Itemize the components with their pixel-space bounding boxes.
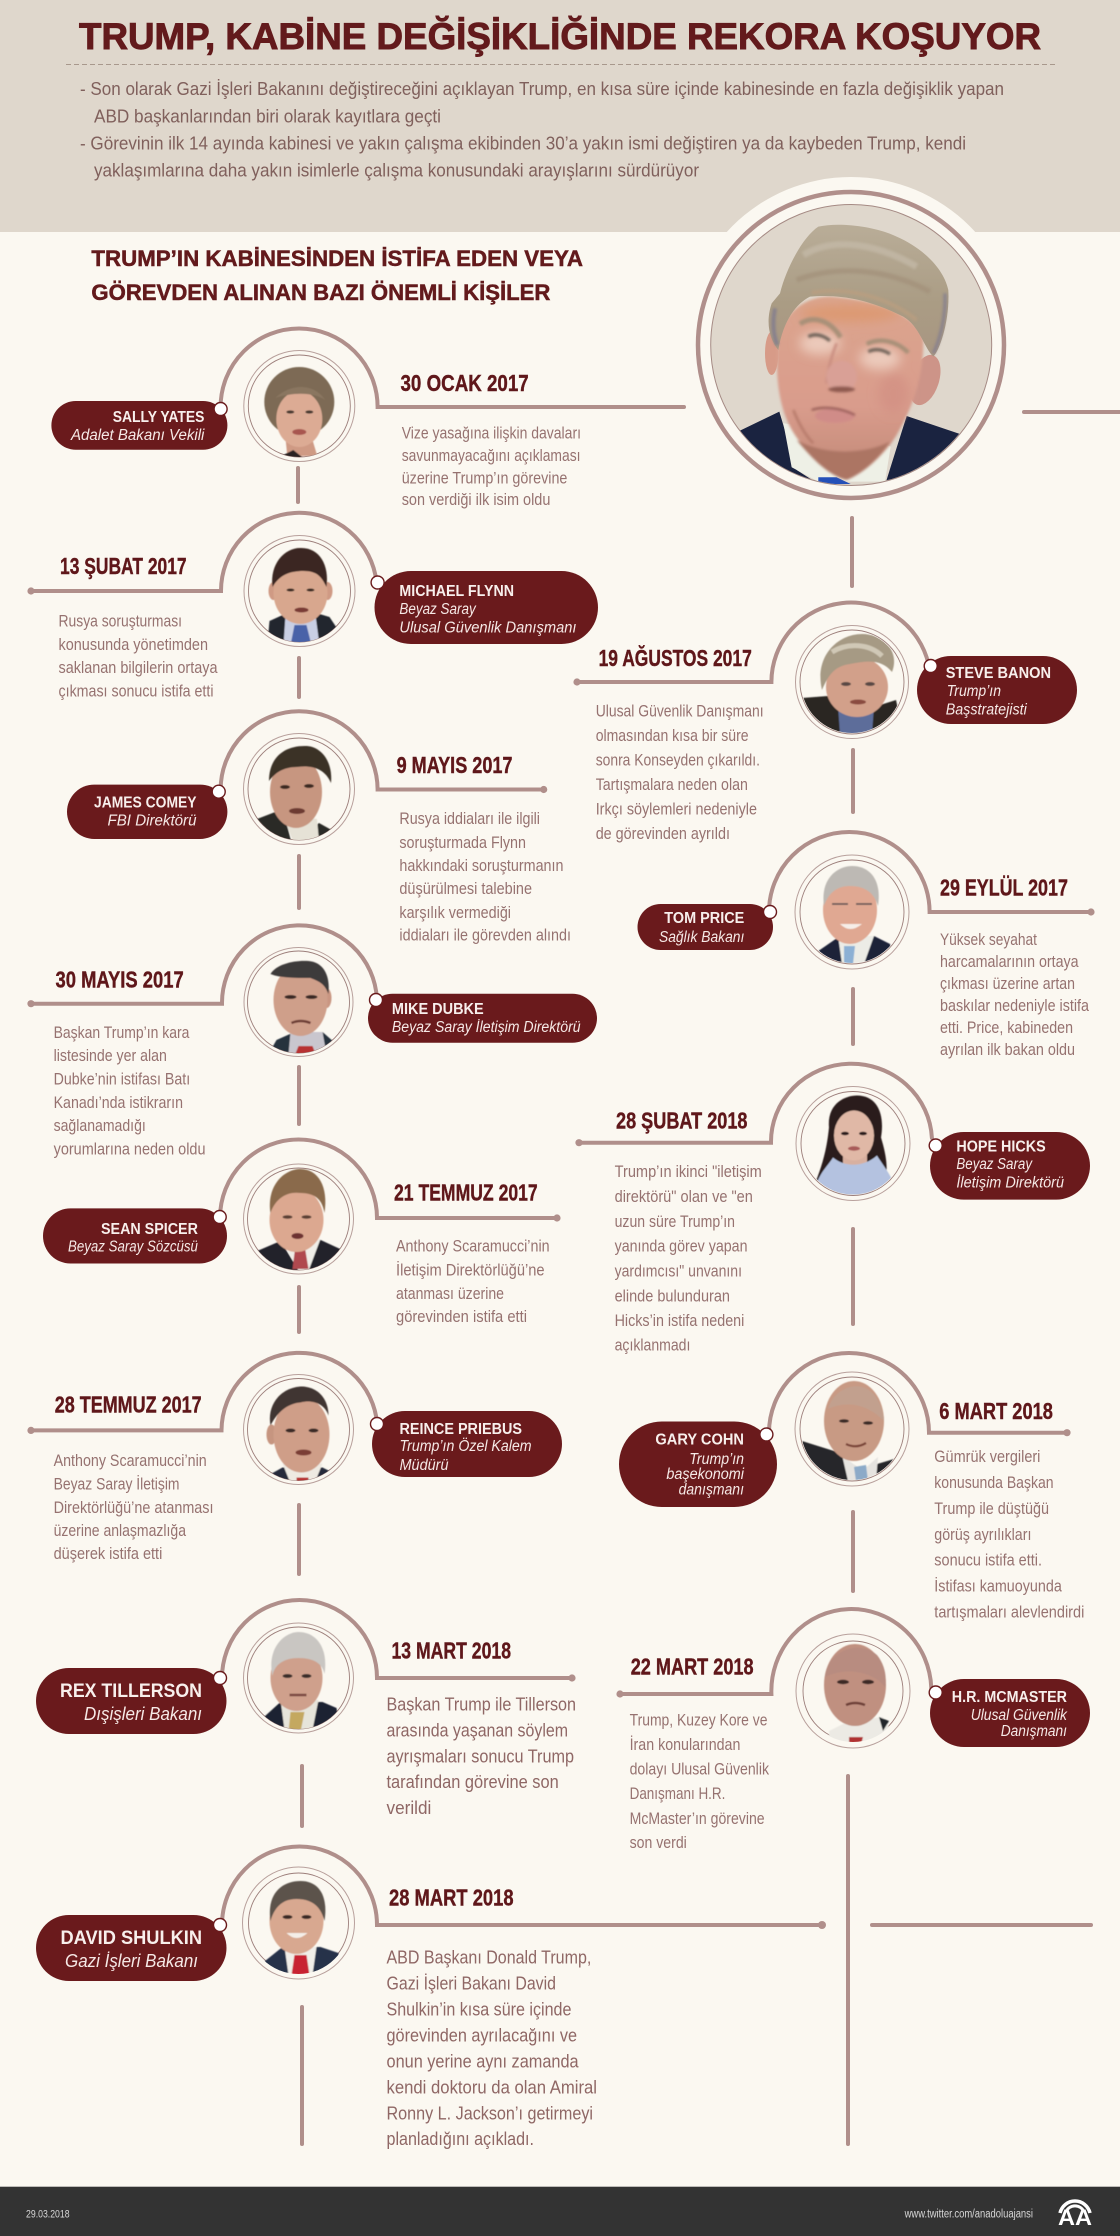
- connector: [300, 2007, 304, 2144]
- description: [615, 1163, 762, 1354]
- name pill: Müdürü: [400, 1457, 449, 1474]
- date: 19 AĞUSTOS 2017: [599, 644, 752, 671]
- name pill: Beyaz Saray: [399, 601, 477, 618]
- icon: AA logo: AA: [1058, 2205, 1092, 2230]
- line: from Trump to the right: [1024, 410, 1120, 414]
- description: Trump’ın ikinci "iletişim: [615, 1163, 762, 1181]
- photo: [244, 734, 354, 844]
- description: kendi doktoru da olan Amiral: [386, 2076, 597, 2097]
- description: [396, 1238, 550, 1326]
- arc and date line: [222, 1846, 821, 1925]
- arc and date line: [577, 603, 928, 682]
- name pill: GARY COHN: [655, 1431, 744, 1448]
- description: saklanan bilgilerin ortaya: [58, 659, 218, 677]
- panel: Trump portrait: [696, 177, 1006, 500]
- name pill: [36, 1668, 226, 1734]
- date: 29 EYLÜL 2017: [940, 874, 1068, 900]
- description: [402, 425, 581, 509]
- photo: [244, 948, 353, 1056]
- description: ayrışmaları sonucu Trump: [386, 1745, 574, 1766]
- arc and date line: [769, 832, 1090, 912]
- name pill: SALLY YATES: [113, 409, 205, 426]
- description: karşılık vermediği: [399, 904, 511, 922]
- connector: [851, 1512, 855, 1591]
- name pill: [51, 401, 227, 450]
- line end: [568, 1674, 576, 1682]
- description: yorumlarına neden oldu: [54, 1141, 205, 1159]
- name pill: Başstratejisti: [946, 701, 1027, 718]
- footer: [0, 2187, 1120, 2236]
- line end: [540, 786, 547, 793]
- line end: [575, 1139, 583, 1146]
- date: 28 TEMMUZ 2017: [55, 1392, 202, 1418]
- line end: [573, 678, 581, 686]
- description: Trump, Kuzey Kore ve: [630, 1712, 768, 1730]
- name pill: HOPE HICKS: [956, 1138, 1046, 1155]
- description: Ulusal Güvenlik Danışmanı: [596, 702, 764, 720]
- photo: [244, 1374, 354, 1484]
- description: [54, 1024, 205, 1159]
- icon: Trump face: [740, 224, 960, 484]
- name pill: Trump’ın Özel Kalem: [400, 1437, 532, 1455]
- panel: Tom Price: [638, 832, 1095, 1059]
- connector: Trump to Banon: [850, 518, 854, 586]
- description: Rusya iddiaları ile ilgili: [399, 810, 540, 828]
- description: tartışmaları alevlendirdi: [934, 1604, 1084, 1622]
- name pill: Adalet Bakanı Vekili: [70, 427, 205, 444]
- description: Anthony Scaramucci’nin: [54, 1452, 207, 1470]
- description: [399, 810, 571, 944]
- description: Irkçı söylemleri nedeniyle: [596, 800, 757, 818]
- name pill: Beyaz Saray: [956, 1156, 1033, 1173]
- name pill: SEAN SPICER: [101, 1221, 198, 1238]
- description: yardımcısı" unvanını: [615, 1262, 742, 1280]
- date: 13 MART 2018: [392, 1638, 511, 1664]
- name pill: Ulusal Güvenlik Danışmanı: [399, 619, 576, 636]
- connector: [851, 1229, 855, 1324]
- intro text: - Görevinin ilk 14 ayında kabinesi ve yakın çalışma ekibinden 30’a yakın ismi değiştiren ya da kaybeden Trump, kendi: [80, 132, 966, 153]
- line end: [616, 1690, 624, 1698]
- name pill: [619, 1422, 777, 1507]
- name pill: [36, 1915, 226, 1981]
- panel: Hope Hicks: [575, 1064, 1090, 1354]
- description: tarafından görevine son: [386, 1771, 559, 1792]
- description: Başkan Trump’ın kara: [54, 1024, 190, 1042]
- description: Dubke’nin istifası Batı: [54, 1070, 190, 1088]
- date: 9 MAYIS 2017: [397, 752, 512, 778]
- panel: Michael Flynn: [27, 513, 598, 700]
- date stamp: 29.03.2018: [26, 2209, 70, 2221]
- twitter url: www.twitter.com/anadoluajansi: [904, 2209, 1033, 2221]
- title: TRUMP, KABİNE DEĞİŞİKLİĞİNDE REKORA KOŞUYOR: [79, 16, 1041, 57]
- description: görevinden ayrılacağını ve: [386, 2024, 577, 2046]
- name pill: İletişim Direktörü: [956, 1175, 1064, 1192]
- panel: Steve Banon: [573, 603, 1077, 843]
- date: 30 MAYIS 2017: [56, 967, 184, 993]
- description: [58, 612, 218, 700]
- arc and date line: [31, 1353, 377, 1430]
- name pill: H.R. MCMASTER: [952, 1689, 1067, 1706]
- arc and date line: [620, 1609, 931, 1694]
- photo: [795, 855, 909, 969]
- panel: Gary Cohn: [619, 1353, 1084, 1622]
- timeline end line: [846, 1776, 850, 2144]
- description: Yüksek seyahat: [940, 931, 1037, 949]
- description: çıkması sonucu istifa etti: [58, 682, 214, 700]
- date: 28 MART 2018: [389, 1884, 514, 1910]
- description: [386, 1694, 576, 1818]
- name pill: [368, 994, 597, 1043]
- name pill: Dışişleri Bakanı: [84, 1704, 202, 1724]
- description: Hicks’in istifa nedeni: [615, 1312, 744, 1330]
- description: İran konularından: [630, 1735, 740, 1754]
- intro text: ABD başkanlarından biri olarak kayıtlara geçti: [94, 105, 441, 126]
- description: Shulkin’in kısa süre içinde: [386, 1999, 571, 2020]
- description: İletişim Direktörlüğü’ne: [396, 1261, 545, 1280]
- photo: [796, 626, 908, 738]
- arc and date line: [221, 711, 543, 790]
- description: Danışmanı H.R.: [630, 1785, 725, 1803]
- name pill: REX TILLERSON: [60, 1681, 202, 1702]
- name pill: başekonomi: [666, 1466, 745, 1483]
- panel: Mike Dubke: [27, 925, 597, 1159]
- panel: Sean Spicer: [43, 1140, 561, 1326]
- connector: [296, 468, 300, 502]
- description: konusunda yönetimden: [58, 636, 208, 654]
- description: elinde bulunduran: [615, 1287, 730, 1305]
- description: soruşturmada Flynn: [399, 834, 526, 852]
- description: Ronny L. Jackson’ı getirmeyi: [386, 2102, 593, 2123]
- date: 21 TEMMUZ 2017: [394, 1180, 538, 1206]
- line: lower right horizontal: [872, 1923, 1091, 1927]
- line end: [818, 1921, 826, 1929]
- subheading: TRUMP’IN KABİNESİNDEN İSTİFA EDEN VEYA: [91, 246, 583, 271]
- description: son verdiği ilk isim oldu: [402, 491, 550, 509]
- description: arasında yaşanan söylem: [386, 1720, 568, 1740]
- panel: Rex Tillerson: [36, 1600, 576, 1818]
- name pill: [370, 1411, 562, 1477]
- date: 22 MART 2018: [631, 1654, 754, 1680]
- description: baskılar nedeniyle istifa: [940, 997, 1090, 1015]
- description: McMaster’ın görevine: [630, 1810, 765, 1828]
- description: Başkan Trump ile Tillerson: [386, 1694, 576, 1714]
- description: hakkındaki soruşturmanın: [399, 857, 564, 875]
- date: 6 MART 2018: [939, 1398, 1053, 1424]
- description: uzun süre Trump’ın: [615, 1213, 735, 1231]
- photo: [796, 1086, 910, 1200]
- description: onun yerine aynı zamanda: [386, 2050, 579, 2071]
- description: Kanadı’nda istikrarın: [54, 1094, 183, 1112]
- description: listesinde yer alan: [54, 1047, 167, 1065]
- connector: [297, 1287, 301, 1332]
- name pill: MIKE DUBKE: [392, 1001, 484, 1018]
- date: 28 ŞUBAT 2018: [616, 1107, 748, 1133]
- line end: [27, 1427, 35, 1434]
- connector: [300, 1766, 304, 1826]
- connector: [297, 856, 301, 908]
- arc and date line: [220, 1140, 556, 1218]
- panel: James Comey: [67, 711, 571, 944]
- description: direktörü" olan ve "en: [615, 1188, 753, 1206]
- description: [630, 1712, 770, 1852]
- photo: [244, 1164, 354, 1274]
- intro text: [80, 78, 1004, 181]
- description: görüş ayrılıkları: [934, 1526, 1031, 1544]
- description: harcamalarının ortaya: [940, 953, 1079, 971]
- name pill: [43, 1208, 227, 1264]
- description: ayrılan ilk bakan oldu: [940, 1041, 1075, 1059]
- description: savunmayacağını açıklaması: [402, 447, 580, 465]
- description: sağlanamadığı: [54, 1117, 146, 1135]
- photo: [244, 350, 355, 462]
- description: etti. Price, kabineden: [940, 1019, 1073, 1037]
- line end: [553, 1214, 561, 1222]
- description: verildi: [386, 1797, 431, 1818]
- description: konusunda Başkan: [934, 1474, 1054, 1492]
- connector: [297, 1067, 301, 1124]
- panel: Reince Priebus: [27, 1353, 562, 1563]
- arc and date line: [31, 925, 377, 1004]
- header band: [0, 0, 1120, 232]
- description: Rusya soruşturması: [58, 612, 182, 630]
- name pill: Ulusal Güvenlik: [971, 1707, 1068, 1724]
- name pill: Danışmanı: [1001, 1723, 1067, 1740]
- description: düşürülmesi talebine: [399, 880, 532, 898]
- connector: [297, 1505, 301, 1574]
- description: üzerine anlaşmazlığa: [54, 1522, 187, 1540]
- description: düşerek istifa etti: [54, 1545, 162, 1563]
- line end: [1087, 908, 1095, 916]
- description: üzerine Trump’ın görevine: [402, 469, 567, 487]
- description: Tartışmalara neden olan: [596, 776, 748, 794]
- date: 13 ŞUBAT 2017: [60, 553, 187, 579]
- name pill: JAMES COMEY: [94, 794, 197, 812]
- intro text: - Son olarak Gazi İşleri Bakanını değiştireceğini açıklayan Trump, en kısa süre içinde kabinesinde en fazla değişiklik yapan: [80, 78, 1004, 99]
- description: [386, 1947, 597, 2149]
- name pill: [371, 571, 598, 644]
- connector: [851, 989, 855, 1044]
- photo: [242, 1867, 354, 1979]
- name pill: STEVE BANON: [946, 665, 1051, 682]
- description: İstifası kamuoyunda: [934, 1577, 1063, 1596]
- description: görevinden istifa etti: [396, 1308, 527, 1326]
- description: açıklanmadı: [615, 1336, 690, 1354]
- name pill: TOM PRICE: [664, 910, 745, 927]
- line end: [1063, 1429, 1071, 1436]
- name pill: Trump’ın: [947, 683, 1001, 700]
- description: Direktörlüğü’ne atanması: [54, 1499, 213, 1517]
- photo: [244, 536, 355, 646]
- name pill: [917, 656, 1077, 724]
- description: atanması üzerine: [396, 1285, 504, 1303]
- name pill: [929, 1132, 1090, 1200]
- description: [940, 931, 1090, 1059]
- name pill: DAVID SHULKIN: [60, 1928, 202, 1949]
- date: 30 OCAK 2017: [400, 370, 529, 396]
- photo: [244, 1623, 354, 1733]
- name pill: danışmanı: [679, 1482, 744, 1499]
- connector: [297, 658, 301, 697]
- description: [934, 1448, 1084, 1622]
- description: son verdi: [630, 1834, 687, 1852]
- description: planladığını açıkladı.: [386, 2128, 534, 2149]
- description: de görevinden ayrıldı: [596, 825, 730, 843]
- subheading: [91, 246, 583, 305]
- name pill: MICHAEL FLYNN: [399, 583, 514, 600]
- description: sonucu istifa etti.: [934, 1552, 1042, 1570]
- description: Gazi İşleri Bakanı David: [386, 1973, 556, 1994]
- description: olmasından kısa bir süre: [596, 727, 749, 745]
- name pill: [638, 904, 776, 950]
- name pill: [929, 1679, 1090, 1747]
- description: Beyaz Saray İletişim: [54, 1474, 180, 1493]
- description: ABD Başkanı Donald Trump,: [386, 1947, 591, 1968]
- connector: [851, 750, 855, 812]
- description: yanında görev yapan: [615, 1237, 748, 1255]
- subheading: GÖREVDEN ALINAN BAZI ÖNEMLİ KİŞİLER: [91, 280, 551, 305]
- description: [596, 702, 764, 843]
- description: dolayı Ulusal Güvenlik: [630, 1761, 770, 1779]
- arc and date line: [769, 1353, 1066, 1433]
- photo: [795, 1372, 909, 1486]
- panel: David Shulkin: [36, 1846, 826, 2149]
- panel: H.R. McMaster: [616, 1609, 1090, 1852]
- line end: [27, 1000, 35, 1007]
- name pill: Sağlık Bakanı: [659, 929, 744, 946]
- panel: Sally Yates: [51, 328, 684, 509]
- description: Vize yasağına ilişkin davaları: [402, 425, 581, 443]
- description: çıkması üzerine artan: [940, 975, 1075, 993]
- arc and date line: [222, 1600, 571, 1678]
- line end: [27, 587, 35, 595]
- name pill: Gazi İşleri Bakanı: [65, 1951, 198, 1971]
- name pill: FBI Direktörü: [108, 813, 197, 830]
- intro text: yaklaşımlarına daha yakın isimlerle çalışma konusundaki arayışlarını sürdürüyor: [94, 160, 699, 181]
- name pill: Trump’ın: [689, 1451, 744, 1468]
- name pill: Beyaz Saray İletişim Direktörü: [392, 1019, 581, 1036]
- photo: [796, 1634, 910, 1748]
- arc and date line: [579, 1064, 932, 1143]
- name pill: REINCE PRIEBUS: [400, 1421, 522, 1438]
- description: Trump ile düştüğü: [934, 1500, 1049, 1518]
- description: sonra Konseyden çıkarıldı.: [596, 751, 760, 769]
- description: Gümrük vergileri: [934, 1448, 1040, 1466]
- name pill: Beyaz Saray Sözcüsü: [68, 1239, 198, 1256]
- description: Anthony Scaramucci’nin: [396, 1238, 550, 1256]
- description: [54, 1452, 213, 1563]
- arc and date line: [31, 513, 376, 591]
- name pill: [67, 785, 227, 839]
- arc and date line: [221, 328, 684, 407]
- description: iddiaları ile görevden alındı: [399, 926, 571, 944]
